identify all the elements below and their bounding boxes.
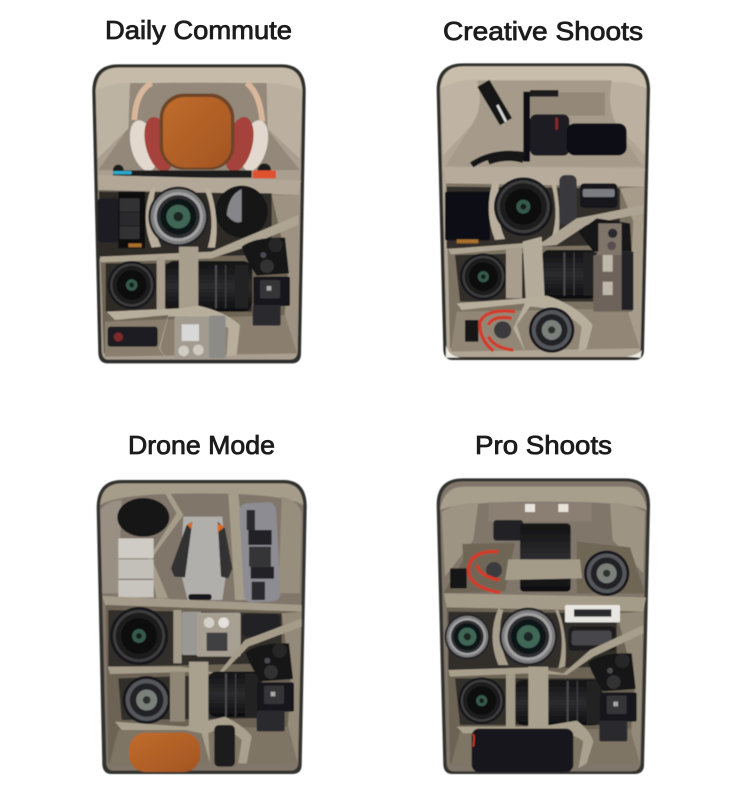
- microphone: [450, 552, 502, 593]
- vertical divider: [157, 257, 165, 310]
- shelf: [444, 167, 645, 187]
- lower compartment: [446, 183, 643, 348]
- bottom floor: [105, 315, 297, 357]
- bag shell: [92, 64, 306, 363]
- divider: [173, 610, 182, 663]
- flash: [242, 614, 280, 637]
- lower strap: [115, 717, 252, 763]
- right wall: [282, 612, 302, 763]
- long lens: [542, 250, 597, 299]
- lens: left: [110, 607, 168, 665]
- camera: [246, 643, 294, 731]
- camera left: [445, 192, 490, 240]
- divider: [506, 673, 515, 727]
- flash and battery: [98, 192, 145, 248]
- silver device: [182, 612, 241, 657]
- bottom floor: [109, 727, 298, 765]
- camera: [242, 238, 290, 326]
- strap: [523, 237, 545, 304]
- side pads: [278, 497, 302, 593]
- side pads: [442, 503, 478, 577]
- caged camera: [578, 218, 633, 312]
- panel: Daily Commute bag: [92, 64, 306, 363]
- drone: [171, 517, 232, 600]
- dividers: [146, 188, 161, 248]
- strap band: [448, 625, 643, 677]
- headphones: [125, 83, 273, 175]
- bag shell: [437, 63, 650, 360]
- left pad: [100, 500, 122, 593]
- panel: Creative Shoots bag: [437, 63, 650, 360]
- bottom floor: [451, 728, 640, 766]
- dark rear: [99, 192, 272, 312]
- microphone: [465, 311, 515, 351]
- title: Pro Shoots: Pro Shoots: [475, 430, 612, 460]
- lower compartment: [447, 607, 643, 763]
- shelf: [444, 593, 646, 612]
- shelf: [98, 175, 301, 195]
- compartment dividers: [148, 493, 183, 598]
- battery: [559, 175, 577, 225]
- strap: [189, 662, 208, 727]
- title: Daily Commute: Daily Commute: [105, 15, 292, 45]
- lens: front center: [494, 177, 553, 236]
- dividers: [489, 179, 505, 240]
- back patch: [530, 92, 605, 116]
- orange case: [160, 94, 234, 170]
- long lens: [515, 680, 602, 725]
- title: Creative Shoots: Creative Shoots: [443, 16, 643, 46]
- dark rear: [447, 187, 620, 302]
- lower strap: [107, 306, 240, 360]
- dark rear: [108, 610, 282, 720]
- lower strap: [457, 296, 593, 352]
- strap: [179, 247, 198, 313]
- panel: Pro Shoots bag: [437, 478, 650, 774]
- silver device: [174, 317, 209, 359]
- brown case: [129, 733, 200, 772]
- caged camera: [488, 502, 592, 541]
- lens: lower left: [458, 677, 505, 724]
- strap band: [448, 205, 643, 254]
- long lens: [165, 261, 252, 312]
- lens: left: [460, 253, 507, 300]
- bottom floor: [451, 308, 640, 352]
- small black device: [214, 725, 235, 767]
- batteries: [118, 538, 154, 597]
- vertical divider: [506, 248, 522, 298]
- lid band: [100, 483, 303, 505]
- lid band: [440, 487, 647, 510]
- lid band: [440, 66, 647, 88]
- panel: Drone Mode bag: [97, 480, 307, 774]
- lens: bottom: [529, 307, 574, 353]
- lower compartment: [98, 190, 299, 353]
- lens: lower: [123, 676, 171, 724]
- bottom corners: [446, 345, 462, 358]
- lens: upper right: [584, 551, 629, 596]
- compartment walls: [443, 543, 515, 593]
- right wall: [620, 187, 643, 348]
- side pads: [441, 80, 480, 155]
- lens: front center: [148, 187, 208, 247]
- lower compartment: [106, 605, 302, 763]
- lid band: [96, 68, 302, 90]
- lens: left: [108, 261, 156, 309]
- right wall: [272, 195, 299, 353]
- long lens: [208, 672, 262, 717]
- strap band: [100, 215, 298, 262]
- dividers: [492, 608, 508, 665]
- upright lens: [520, 523, 571, 592]
- strap band: [108, 618, 302, 674]
- flash: [568, 627, 616, 651]
- action camera: [108, 327, 158, 347]
- strap: [528, 667, 548, 730]
- divider: [170, 672, 185, 722]
- right wall: [617, 612, 643, 763]
- white device: [565, 605, 620, 622]
- interior back: [445, 80, 643, 167]
- camera: [588, 653, 637, 741]
- side pads: [96, 83, 130, 158]
- interior back: [98, 83, 300, 170]
- lens: glass dome: [216, 186, 268, 238]
- dark rear: [448, 612, 617, 725]
- black pouch: [472, 729, 573, 772]
- title: Drone Mode: Drone Mode: [128, 430, 275, 460]
- soft case: [117, 498, 169, 537]
- lens: left: [445, 614, 490, 659]
- bag shell: [97, 480, 307, 774]
- game console: [113, 163, 276, 178]
- lens: center: [499, 608, 557, 666]
- strap: horizontal: [505, 559, 582, 580]
- gimbal: [472, 83, 627, 165]
- lower strap: [457, 721, 593, 768]
- monitor: [580, 183, 617, 208]
- shelf: [102, 596, 302, 612]
- remote controller: [239, 502, 281, 603]
- bag shell: [437, 478, 650, 774]
